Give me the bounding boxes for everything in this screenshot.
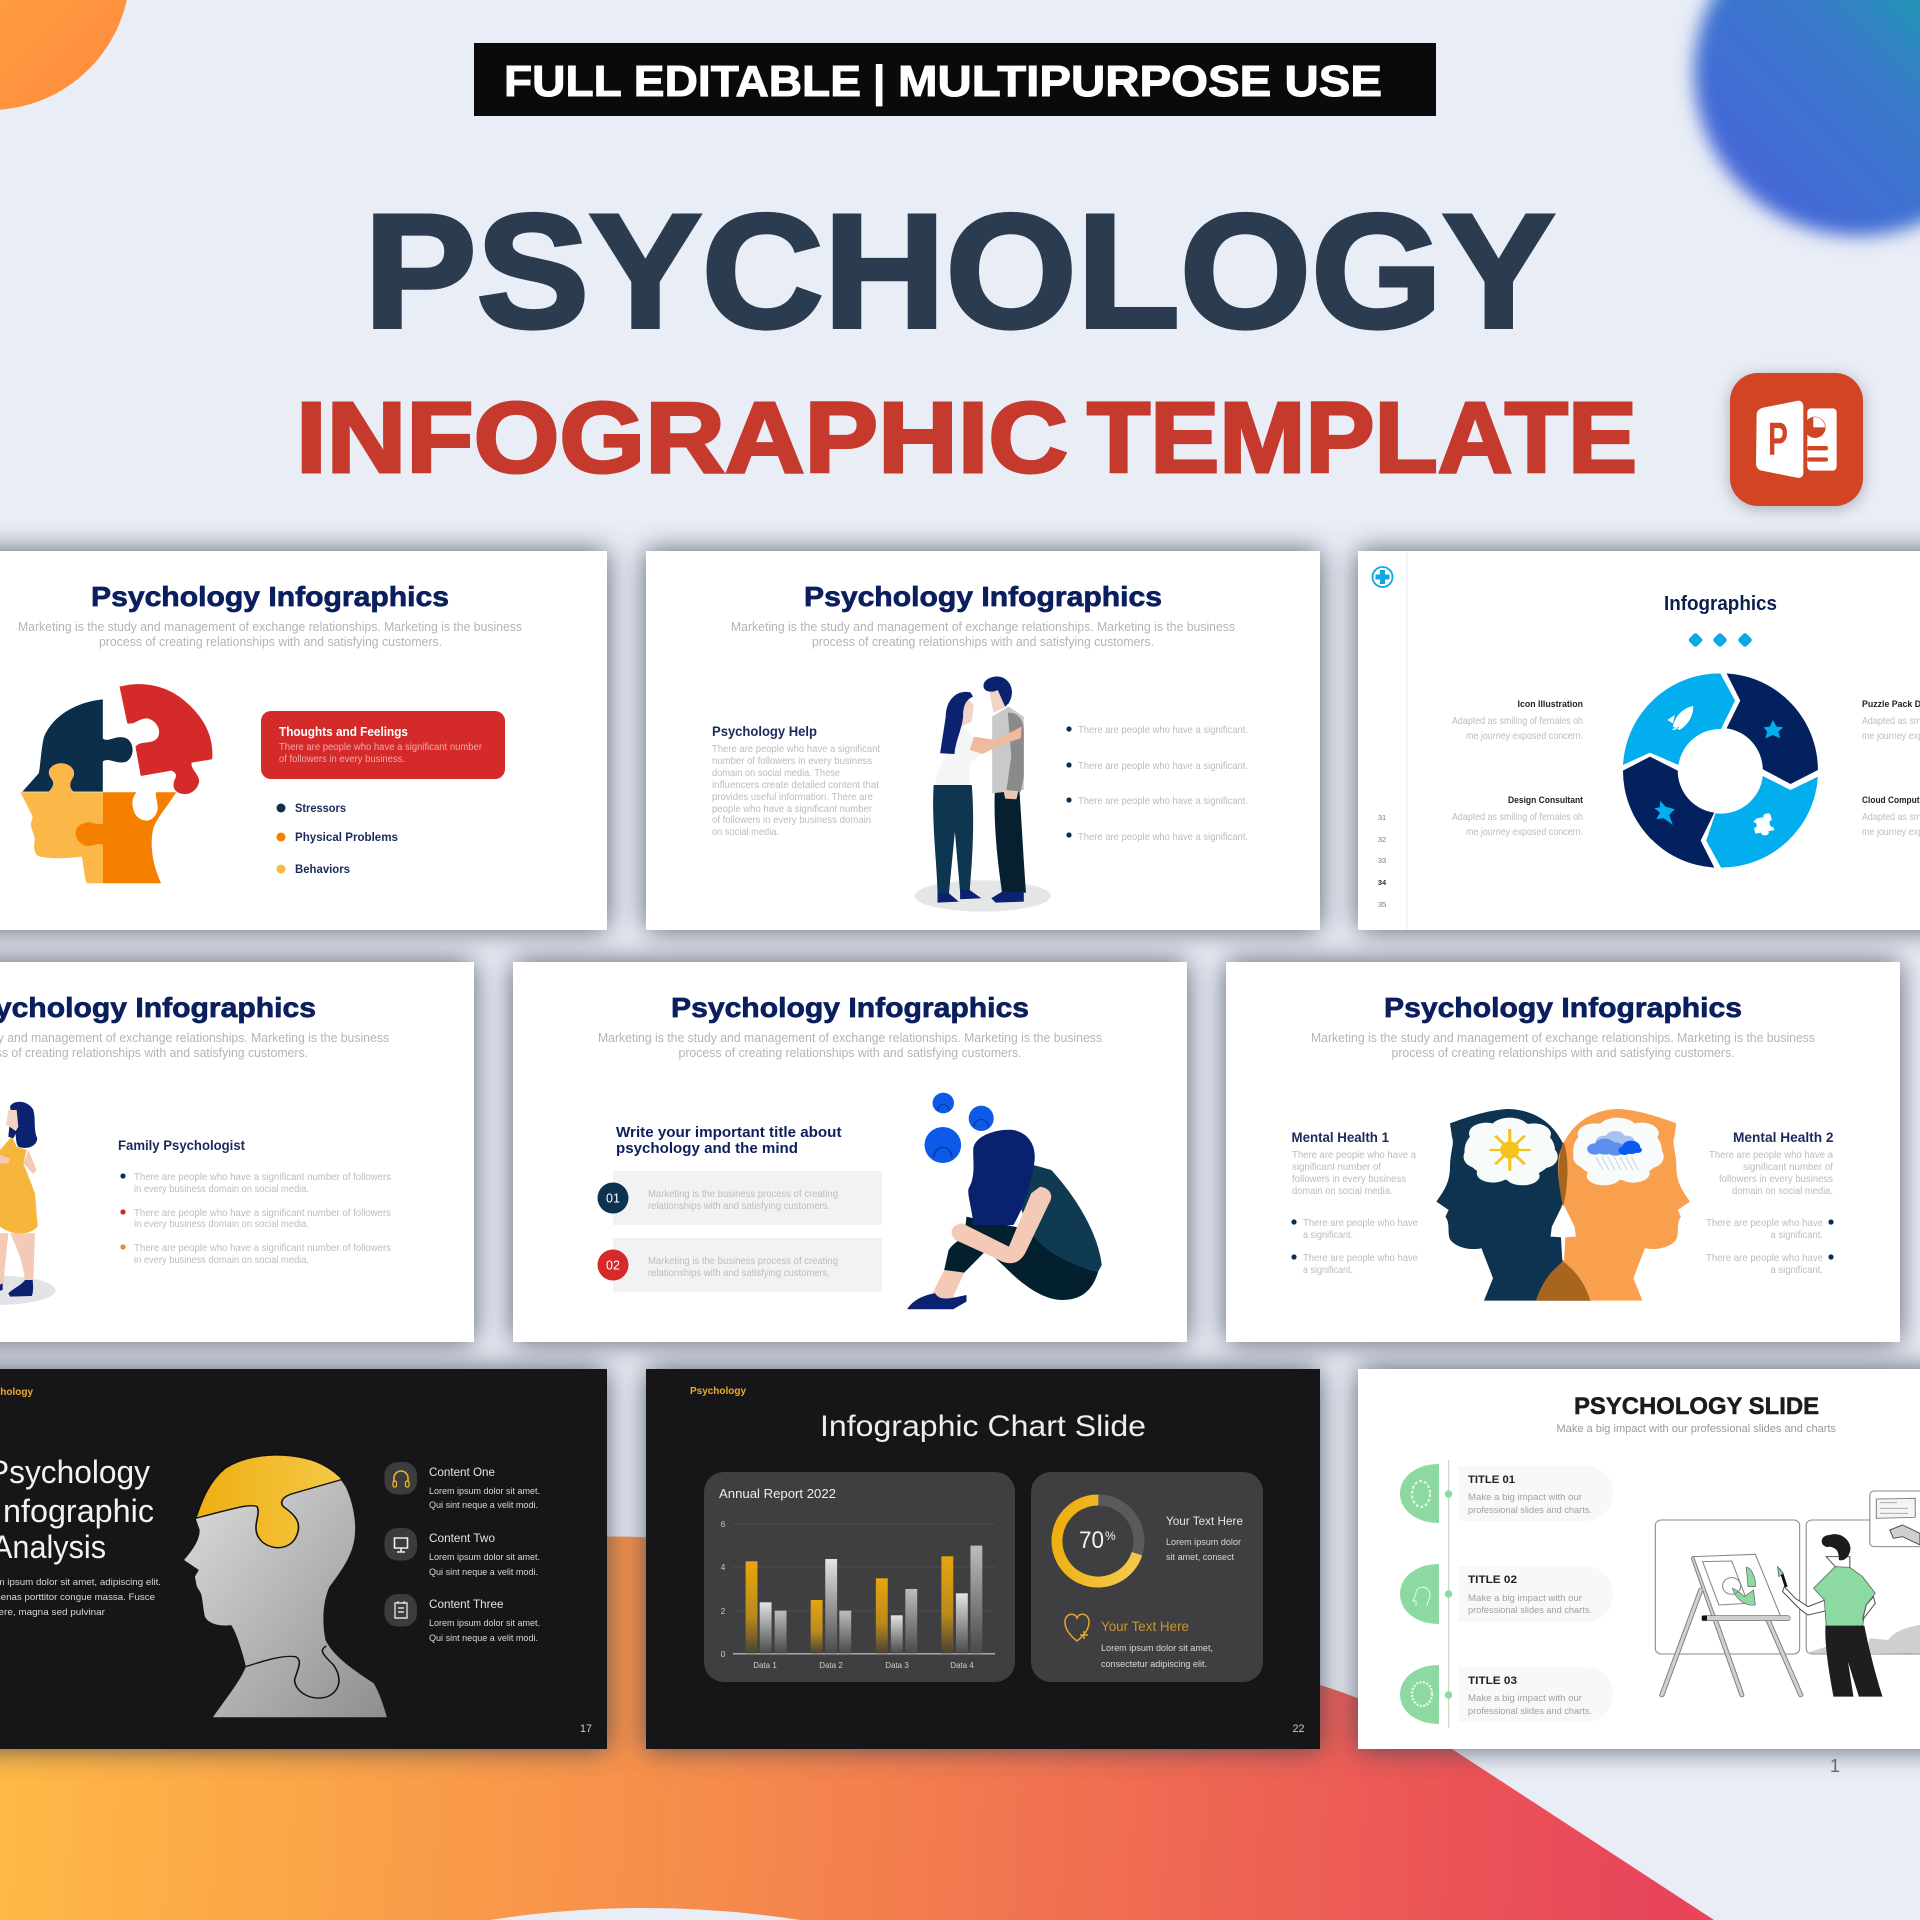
banner: FULL EDITABLE [504, 57, 861, 106]
slide title: Psychology Infographics [671, 992, 1029, 1023]
panel: family psychologist slide [0, 962, 474, 1342]
slide description: Marketing is the study and management of exchange relationships. Marketing is the business [1311, 1031, 1815, 1045]
panel: stats: Your Text Here [1101, 1619, 1189, 1634]
item: content two [384, 1528, 540, 1578]
text block: icon illustration: Icon Illustration [1518, 699, 1583, 710]
list item 01 [598, 1171, 882, 1225]
legend: Physical Problems [295, 832, 398, 844]
list item 02: Marketing is the business process of creating [648, 1255, 838, 1267]
text block: psychology help: domain on social media. These [712, 767, 840, 779]
slide title: Psychology Infographics [1384, 992, 1742, 1023]
text block: psychology help: people who have a significant number [712, 803, 872, 815]
decorative bottom arc [490, 1908, 800, 1920]
page index: 31 [1378, 813, 1386, 822]
slide description: Make a big impact with our professional slides and charts [1556, 1423, 1836, 1435]
slide title: Psychology Infographics [804, 581, 1162, 612]
text block: psychology help: of followers in every business domain [712, 814, 871, 826]
item: title 02: Make a big impact with our [1468, 1593, 1582, 1603]
legend [276, 803, 398, 876]
slide description: process of creating relationships with and satisfying customers. [678, 1046, 1022, 1060]
item: title 03 [1400, 1665, 1613, 1724]
item: title 03: TITLE 03 [1468, 1675, 1517, 1687]
text block: psychology help: number of followers in every business [712, 755, 872, 767]
text block heading: Write your important title about [616, 1124, 842, 1141]
text block: mental health 1: significant number of [1292, 1161, 1381, 1173]
chart: cycle donut [1623, 673, 1818, 868]
text block: mental health 2: a significant. [1770, 1264, 1823, 1276]
item: content three [384, 1594, 540, 1644]
icon: puzzle head [20, 684, 212, 883]
decorative blue circle top right [1694, 0, 1920, 236]
text block: mental health 1 [1291, 1130, 1418, 1276]
diamonds [1688, 632, 1753, 648]
illustration: painter at easel [1655, 1491, 1920, 1697]
panel: stats: Your Text Here [1166, 1514, 1243, 1528]
text block: mental health 1: There are people who have a [1292, 1149, 1416, 1161]
list item 02: relationships with and satisfying customers. [648, 1267, 830, 1279]
text block: mental health 2 [1706, 1130, 1834, 1276]
panel: annual report chart: 2 [721, 1607, 726, 1616]
bullet list: There are people who have a significant. [1078, 795, 1248, 807]
text block: design consultant: Adapted as smiling of females oh [1452, 811, 1583, 823]
list item 01: 01 [606, 1192, 620, 1206]
slide title: Infographic Chart Slide [820, 1410, 1146, 1443]
text block: psychology help: provides useful information. There are [712, 791, 873, 803]
panel: sad woman slide [513, 962, 1187, 1342]
page number: 22 [1292, 1723, 1304, 1735]
bullet list: in every business domain on social media. [134, 1218, 309, 1230]
text block: icon illustration: Adapted as smiling of females oh [1452, 715, 1583, 727]
bullet list: in every business domain on social media. [134, 1254, 309, 1266]
slide description: process of creating relationships with and satisfying customers. [1392, 1046, 1734, 1060]
list item 02: 02 [606, 1258, 620, 1272]
legend: Stressors [295, 803, 346, 815]
panel: mental health slide [1226, 962, 1900, 1342]
text block: psychology help: on social media. [712, 826, 779, 838]
legend: Behaviors [295, 864, 350, 876]
item: content one [384, 1462, 540, 1511]
text block heading: psychology and the mind [616, 1140, 798, 1157]
text block: mental health 2: a significant. [1770, 1229, 1823, 1241]
main title: PSYCHOLOGY [364, 181, 1555, 362]
panel: stats: sit amet, consect [1166, 1552, 1234, 1563]
slide description: process of creating relationships with and satisfying customers. [812, 635, 1154, 649]
text block: mental health 1: followers in every business [1292, 1173, 1406, 1185]
item: title 01 [1400, 1464, 1613, 1523]
item: content one: Lorem ipsum dolor sit amet. [429, 1486, 540, 1497]
bullet list: There are people who have a significant number of followers [134, 1207, 391, 1219]
page number: 1 [1830, 1756, 1840, 1776]
slide description [598, 1031, 1102, 1060]
illustration: puzzle head [184, 1455, 387, 1717]
chart: 70 percent donut: % [1105, 1529, 1116, 1543]
panel: stats [1031, 1472, 1263, 1682]
text block: psychology help: There are people who have a significant [712, 743, 880, 755]
bullet list [1066, 724, 1248, 843]
slide description [731, 620, 1235, 649]
text block: mental health 1: domain on social media. [1292, 1185, 1392, 1197]
item: title 01: Make a big impact with our [1468, 1492, 1582, 1502]
illustration: sad woman with frowning faces [907, 1093, 1102, 1309]
text block: mental health 1: There are people who have [1303, 1217, 1418, 1229]
text block: icon illustration: me journey exposed concern. [1466, 730, 1583, 742]
text block: design consultant: Design Consultant [1508, 795, 1584, 806]
page index: 33 [1378, 856, 1386, 865]
banner: MULTIPURPOSE USE [898, 57, 1382, 106]
slide title: Infographics [1664, 593, 1777, 615]
subtitle [296, 382, 1637, 494]
panel: psychology help slide [646, 551, 1320, 930]
item: content two: Content Two [429, 1531, 495, 1545]
subtitle: TEMPLATE [1087, 382, 1637, 494]
panel: annual report chart: Annual Report 2022 [719, 1486, 836, 1501]
panel: annual report chart: 6 [721, 1520, 726, 1529]
item: content one: Content One [429, 1465, 495, 1479]
panel: annual report chart: Data 1 [753, 1661, 777, 1670]
slide tag: Psychology [690, 1386, 746, 1397]
panel: annual report chart: 0 [721, 1650, 726, 1659]
text block: psychology help [712, 724, 880, 838]
panel: annual report chart: Data 2 [819, 1661, 843, 1670]
banner: | [873, 57, 885, 107]
callout: thoughts and feelings [261, 711, 505, 779]
bullet list: There are people who have a significant. [1078, 831, 1248, 843]
item: content three: Qui sint neque a velit modi. [429, 1633, 538, 1644]
item: content one: Qui sint neque a velit modi. [429, 1500, 538, 1511]
text block: mental health 2: significant number of [1743, 1161, 1833, 1173]
text block: mental health 1: Mental Health 1 [1292, 1130, 1389, 1145]
item: content two: Lorem ipsum dolor sit amet. [429, 1552, 540, 1563]
item: title 03: Make a big impact with our [1468, 1693, 1582, 1703]
text block: design consultant [1452, 795, 1584, 838]
bullet list: There are people who have a significant. [1078, 724, 1248, 736]
text block: mental health 2: There are people who have [1706, 1252, 1823, 1264]
panel: stats: Lorem ipsum dolor [1166, 1537, 1241, 1548]
list item 01: relationships with and satisfying customers. [648, 1200, 830, 1212]
text block: mental health 2: There are people who have a [1709, 1149, 1833, 1161]
panel: puzzle head slide [0, 551, 607, 930]
bullet list: There are people who have a significant. [1078, 760, 1248, 772]
decorative bottom gradient wave [0, 1537, 1714, 1920]
callout: thoughts and feelings: of followers in every business. [279, 753, 405, 765]
text block: mental health 2: Mental Health 2 [1733, 1130, 1834, 1145]
item: title 02 [1400, 1564, 1613, 1624]
page index [1378, 813, 1387, 909]
text block: mental health 1: There are people who have [1303, 1252, 1418, 1264]
text block: cloud computing [1862, 795, 1920, 838]
text block: mental health 1: a significant. [1303, 1264, 1353, 1276]
chart: 70 percent donut: 70 [1079, 1527, 1104, 1554]
panel: annual report chart [704, 1472, 1015, 1682]
text block: mental health 2: There are people who have [1706, 1217, 1823, 1229]
page index: 32 [1378, 835, 1386, 844]
bullet list: There are people who have a significant number of followers [134, 1242, 391, 1254]
slide description: process of creating relationships with and satisfying customers. [99, 635, 442, 649]
subtitle: INFOGRAPHIC [296, 382, 1068, 494]
chart: 70 percent donut [1046, 1489, 1150, 1593]
slide title: Psychology Infographics [91, 581, 449, 612]
text block: mental health 1: a significant. [1303, 1229, 1353, 1241]
list item 02 [598, 1238, 882, 1292]
bullet list [120, 1171, 391, 1266]
icon: PowerPoint: P [1768, 413, 1788, 465]
slide description [0, 1031, 389, 1060]
bullet list: in every business domain on social media. [134, 1183, 309, 1195]
slide heading [0, 1454, 154, 1565]
item: content three: Content Three [429, 1597, 504, 1611]
text block: icon illustration [1452, 699, 1583, 742]
illustration: couple [915, 676, 1051, 912]
bullet list: There are people who have a significant number of followers [134, 1171, 391, 1183]
page number: 17 [580, 1723, 592, 1735]
panel: psychology slide with painter [1358, 1369, 1920, 1749]
slide description [18, 620, 522, 649]
panel: dark chart slide [646, 1369, 1320, 1749]
slide description [0, 1577, 161, 1618]
text block heading [616, 1124, 842, 1157]
text block: mental health 2: domain on social media. [1732, 1185, 1833, 1197]
text block: puzzle pack design [1862, 699, 1920, 742]
card shadows [0, 551, 1920, 1749]
text block: design consultant: me journey exposed concern. [1466, 826, 1583, 838]
item: title 02: professional slides and charts. [1468, 1605, 1592, 1615]
callout: thoughts and feelings: Thoughts and Feelings [279, 725, 408, 739]
item: content two: Qui sint neque a velit modi. [429, 1567, 538, 1578]
panel: annual report chart: Data 3 [885, 1661, 909, 1670]
panel: stats: Lorem ipsum dolor sit amet, [1101, 1643, 1213, 1654]
item: title 02: TITLE 02 [1468, 1574, 1517, 1586]
item: title 01: professional slides and charts. [1468, 1505, 1592, 1515]
page index: 34 [1378, 878, 1387, 887]
panel: annual report chart: Data 4 [950, 1661, 974, 1670]
panel: annual report chart: 4 [721, 1563, 726, 1572]
decorative orange circle top left [0, 0, 130, 110]
text block: family psychologist: Family Psychologist [118, 1138, 245, 1153]
callout: thoughts and feelings: There are people who have a significant number [279, 741, 482, 753]
item: title 03: professional slides and charts. [1468, 1706, 1592, 1716]
icon: medical cross [1372, 567, 1392, 587]
panel: donut infographics slide [1358, 551, 1920, 930]
slide description [1311, 1031, 1815, 1060]
item: content three: Lorem ipsum dolor sit amet. [429, 1618, 540, 1629]
illustration: woman in yellow dress [0, 1102, 56, 1305]
text block: mental health 2: followers in every business [1719, 1173, 1833, 1185]
item: title 01: TITLE 01 [1468, 1474, 1515, 1486]
slide description: Marketing is the study and management of exchange relationships. Marketing is the business [731, 620, 1235, 634]
illustration: two heads sun and rain [1436, 1109, 1690, 1301]
slide description: Marketing is the study and management of exchange relationships. Marketing is the business [18, 620, 522, 634]
page index: 35 [1378, 900, 1386, 909]
icon: PowerPoint [1730, 373, 1863, 509]
list item 01: Marketing is the business process of creating [648, 1188, 838, 1200]
banner [474, 43, 1436, 116]
panel: stats: consectetur adipiscing elit. [1101, 1659, 1207, 1670]
icon: heart with plus [1065, 1614, 1089, 1641]
slide description: Marketing is the study and management of exchange relationships. Marketing is the business [598, 1031, 1102, 1045]
text block: psychology help: influencers create detailed content that [712, 779, 879, 791]
text block: psychology help: Psychology Help [712, 724, 817, 739]
panel: dark head analysis slide [0, 1369, 607, 1749]
slide title: PSYCHOLOGY SLIDE [1574, 1393, 1819, 1420]
